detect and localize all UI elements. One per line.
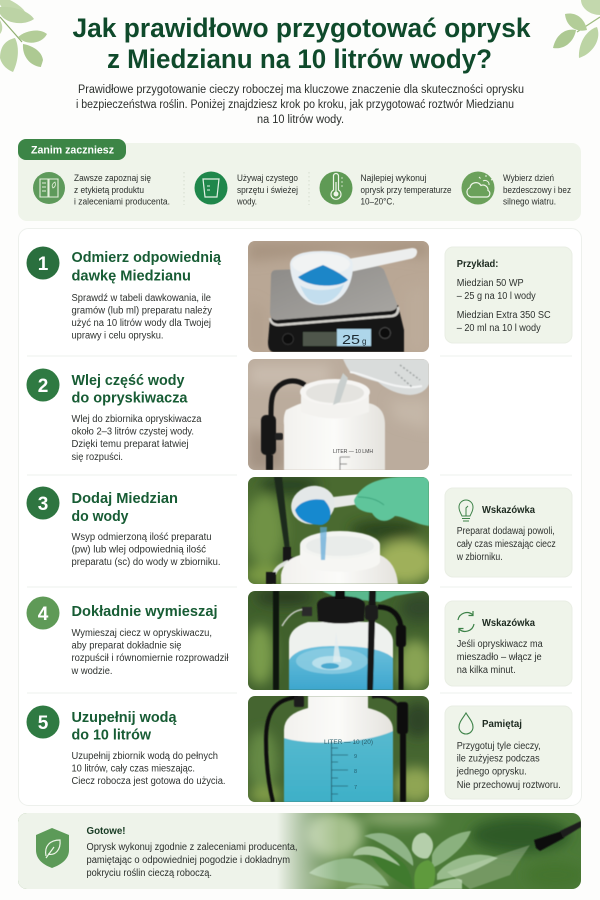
step 4 text: w wodzie. bbox=[71, 666, 112, 677]
icon: measuring cup bbox=[194, 172, 228, 204]
title bbox=[72, 13, 531, 74]
item: label: Zawsze zapoznaj się bbox=[74, 173, 151, 183]
example box: – 25 g na 10 l wody bbox=[457, 291, 536, 302]
icon: thermometer bbox=[320, 172, 352, 204]
step 3 text: (pw) lub wlej odpowiednią ilość bbox=[72, 544, 206, 556]
footer text: Gotowe! bbox=[86, 825, 126, 837]
panel: steps card bbox=[18, 228, 582, 806]
tab heading bbox=[18, 139, 126, 160]
step 5 text bbox=[72, 751, 226, 787]
intro text: Prawidłowe przygotowanie cieczy roboczej ma kluczowe znaczenie dla skuteczności oprysku bbox=[78, 84, 524, 96]
step number 3: 3 bbox=[38, 494, 48, 515]
footer text: pokryciu roślin cieczą roboczą. bbox=[86, 868, 212, 879]
icon: water drop bbox=[459, 713, 473, 734]
title: Jak prawidłowo przygotować oprysk bbox=[72, 13, 531, 43]
photo: sprayer filled to 10 litres: 8 bbox=[354, 769, 357, 775]
step 4 text: Wymieszaj ciecz w opryskiwaczu, bbox=[72, 628, 212, 639]
step 2 text: około 2–3 litrów czystej wody. bbox=[72, 426, 194, 438]
step number 2: 2 bbox=[38, 376, 48, 397]
step 4 bbox=[26, 588, 572, 690]
item: temperature: 10–20°C. bbox=[360, 196, 394, 206]
tab heading: Zanim zaczniesz bbox=[31, 144, 114, 156]
step 4 text: aby preparat dokładnie się bbox=[72, 640, 182, 652]
step number 1 bbox=[26, 246, 60, 280]
tip: powoli: Wskazówka bbox=[482, 505, 535, 516]
step 4 text bbox=[71, 628, 229, 677]
item: temperature: oprysk przy temperaturze bbox=[360, 185, 452, 195]
icon: recycle arrows bbox=[458, 611, 474, 633]
tip: pamiętaj bbox=[445, 706, 572, 799]
step 1 text: Sprawdź w tabeli dawkowania, ile bbox=[72, 293, 212, 304]
item: clean equipment: wody. bbox=[236, 196, 257, 206]
step number 3 bbox=[26, 486, 60, 520]
icon: light bulb bbox=[459, 500, 473, 521]
step 3 text bbox=[72, 532, 220, 568]
footer text: pamiętając o odpowiedniej pogodzie i dokładnym bbox=[86, 855, 290, 866]
item: weather: Wybierz dzień bbox=[503, 173, 554, 183]
step 3 bbox=[26, 475, 572, 585]
tip: powoli bbox=[445, 488, 572, 577]
item: weather: silnego wiatru. bbox=[503, 196, 556, 206]
item: clean equipment: Używaj czystego bbox=[237, 173, 298, 183]
footer text bbox=[86, 825, 298, 879]
item: label: z etykietą produktu bbox=[74, 185, 144, 195]
footer text: Oprysk wykonuj zgodnie z zaleceniami producenta, bbox=[86, 842, 298, 853]
item: temperature bbox=[320, 172, 452, 206]
step 5 heading bbox=[72, 710, 177, 744]
title: z Miedzianu na 10 litrów wody? bbox=[107, 44, 492, 74]
step number 4 bbox=[26, 596, 60, 630]
item: label bbox=[33, 172, 170, 206]
example box bbox=[445, 247, 572, 343]
item: clean equipment: sprzętu i świeżej bbox=[237, 185, 298, 195]
decoration: leaves top left bbox=[0, 0, 47, 72]
step 5 heading: Uzupełnij wodą bbox=[72, 710, 177, 726]
step 1 text: gramów (lub ml) preparatu należy bbox=[72, 306, 212, 316]
item: clean equipment bbox=[194, 172, 298, 206]
step number 5 bbox=[26, 706, 60, 738]
tip: mieszadło: Jeśli opryskiwacz ma bbox=[457, 639, 543, 650]
example box: Przykład: bbox=[457, 259, 498, 270]
step 2 text: Wlej do zbiornika opryskiwacza bbox=[72, 414, 202, 425]
step 4 text: rozpuścił i równomiernie rozprowadził bbox=[72, 653, 229, 664]
step 2 heading: Wlej część wody bbox=[72, 373, 184, 389]
tip: pamiętaj: ile zużyjesz podczas bbox=[457, 754, 540, 764]
step 1 text: użyć na 10 litrów wody dla Twojej bbox=[72, 318, 211, 329]
photo: sprayer filled to 10 litres: LITER — 10 (20) bbox=[324, 739, 373, 746]
step number 2 bbox=[26, 368, 60, 402]
photo: scoop on kitchen scale: 25 bbox=[342, 332, 360, 347]
tip: mieszadło: mieszadło – włącz je bbox=[457, 652, 542, 663]
step 3 heading: Dodaj Miedzian bbox=[72, 491, 178, 507]
step 3 text: preparatu (sc) do wody w zbiorniku. bbox=[72, 557, 220, 568]
tip: mieszadło: na kilka minut. bbox=[457, 665, 516, 676]
step 1 bbox=[26, 241, 429, 352]
photo: pouring water into sprayer: LITER — 10 LMH bbox=[333, 449, 373, 455]
decoration: leaves top right bbox=[553, 0, 600, 58]
tip: pamiętaj: jednego oprysku. bbox=[456, 766, 527, 778]
photo: pouring water into sprayer bbox=[248, 359, 429, 470]
step 1 heading bbox=[72, 250, 222, 284]
step 1 heading: Odmierz odpowiednią bbox=[72, 250, 222, 266]
tip: pamiętaj: Pamiętaj bbox=[482, 719, 522, 730]
step 1 text: uprawy i celu oprysku. bbox=[72, 330, 164, 342]
intro text: na 10 litrów wody. bbox=[257, 114, 344, 126]
item: weather: bezdesczowy i bez bbox=[503, 185, 571, 195]
photo: scoop on kitchen scale: g bbox=[362, 337, 366, 346]
step 2 text bbox=[72, 414, 202, 463]
step number 5: 5 bbox=[38, 713, 49, 734]
photo: sprayer filled to 10 litres: 7 bbox=[354, 785, 357, 791]
tip: mieszadło bbox=[445, 601, 572, 686]
step 2 text: się rozpuści. bbox=[72, 452, 123, 463]
photo: sprayer filled to 10 litres: 9 bbox=[354, 754, 357, 760]
step 2 bbox=[26, 359, 429, 470]
photo: sprayer filled to 10 litres bbox=[247, 696, 435, 803]
intro text bbox=[76, 84, 524, 126]
step 3 heading bbox=[72, 491, 178, 525]
step 1 text bbox=[72, 293, 212, 342]
icon: sun and cloud bbox=[462, 172, 494, 204]
item: weather bbox=[462, 172, 571, 206]
panel: zanim zaczniesz bbox=[18, 139, 581, 221]
tip: mieszadło: Wskazówka bbox=[482, 618, 535, 629]
example box: Miedzian Extra 350 SC bbox=[457, 310, 551, 321]
step 2 heading bbox=[72, 373, 188, 406]
step 2 text: Dzięki temu preparat łatwiej bbox=[72, 439, 188, 450]
panel: gotowe footer bbox=[18, 813, 581, 889]
tip: pamiętaj: Nie przechowuj roztworu. bbox=[457, 780, 561, 791]
intro text: i bezpieczeństwa roślin. Poniżej znajdziesz krok po kroku, jak przygotować roztwór Miedzianu bbox=[76, 99, 514, 111]
item: temperature: Najlepiej wykonuj bbox=[360, 173, 426, 183]
icon: open book bbox=[33, 172, 65, 204]
item: label: i zaleceniami producenta. bbox=[74, 196, 170, 206]
tip: pamiętaj: Przygotuj tyle cieczy, bbox=[457, 741, 541, 752]
step 3 heading: do wody bbox=[72, 509, 128, 525]
step 5 text: 10 litrów, cały czas mieszając. bbox=[72, 764, 195, 774]
step 5 heading: do 10 litrów bbox=[72, 728, 152, 744]
tip: powoli: Preparat dodawaj powoli, bbox=[457, 526, 555, 537]
photo: adding powder from scoop bbox=[245, 475, 435, 585]
tip: powoli: w zbiorniku. bbox=[456, 552, 503, 563]
step 1 heading: dawkę Miedzianu bbox=[72, 268, 191, 284]
step 5 text: Uzupełnij zbiornik wodą do pełnych bbox=[72, 751, 218, 762]
step 5 text: Ciecz robocza jest gotowa do użycia. bbox=[72, 776, 226, 787]
example box: Miedzian 50 WP bbox=[457, 278, 524, 289]
example box: – 20 ml na 10 l wody bbox=[457, 323, 541, 334]
icon: shield with leaf bbox=[36, 828, 69, 868]
step number 4: 4 bbox=[38, 604, 49, 625]
step 3 text: Wsyp odmierzoną ilość preparatu bbox=[72, 532, 212, 543]
step 4 heading: Dokładnie wymieszaj bbox=[72, 604, 218, 620]
step 5 bbox=[26, 696, 572, 803]
tip: powoli: cały czas mieszając ciecz bbox=[457, 539, 556, 550]
photo: spraying a plant bbox=[18, 813, 581, 889]
photo: scoop on kitchen scale bbox=[248, 241, 429, 352]
step 2 heading: do opryskiwacza bbox=[72, 390, 188, 406]
step number 1: 1 bbox=[38, 254, 49, 275]
photo: mixing blue liquid bbox=[246, 588, 440, 690]
